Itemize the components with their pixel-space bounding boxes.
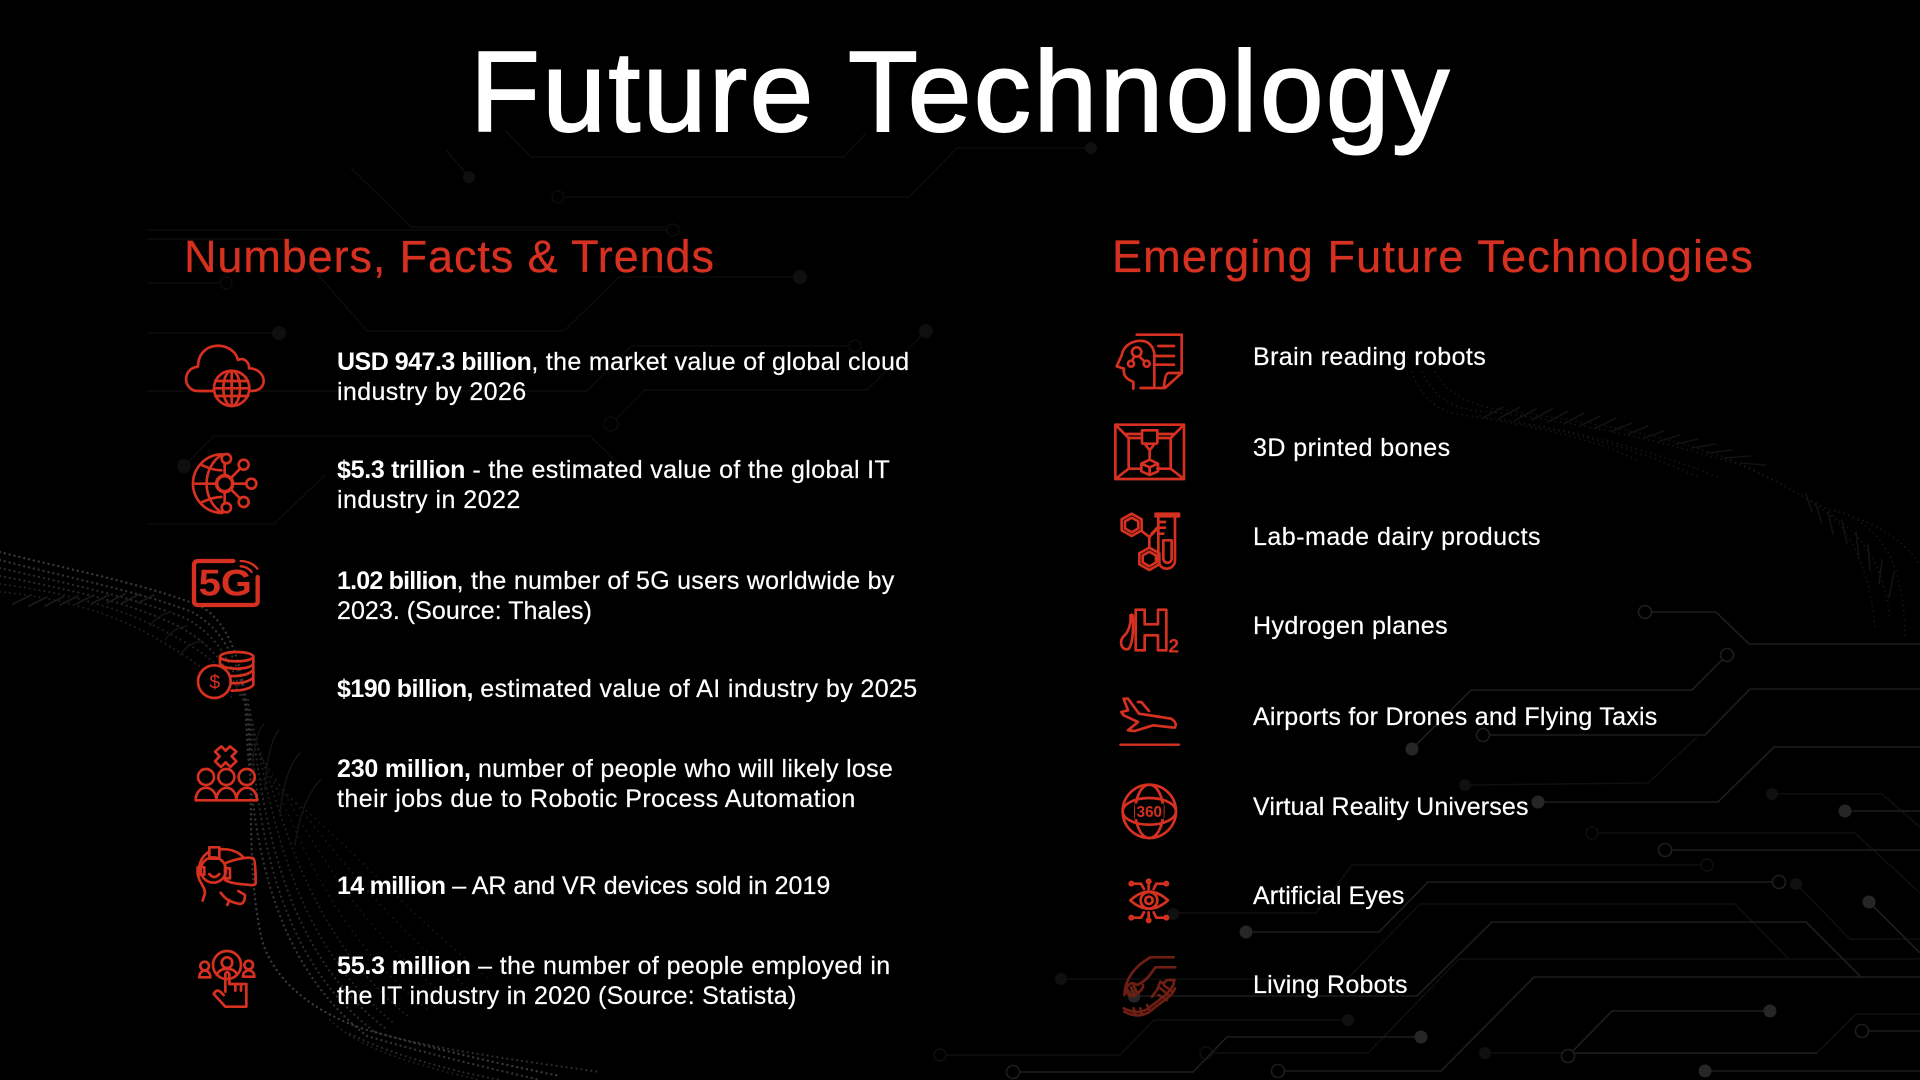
- heading: emerging future technologies: Emerging Future Technologies: [1112, 231, 1754, 282]
- text: airports for drones: Airports for Drones and Flying Taxis: [1253, 703, 1658, 731]
- text: IT employment: 55.3 million – the number of people employed in: [337, 952, 891, 980]
- icon: dollar coin and stack: [196, 650, 255, 700]
- text: cloud industry: [337, 348, 909, 406]
- text: IT industry value: industry in 2022: [337, 486, 521, 514]
- text: AI industry: $190 billion, estimated value of AI industry by 2025: [337, 675, 918, 703]
- icon: molecule and test tube: [1120, 512, 1180, 572]
- icon: 360 globe: 360: [1137, 804, 1162, 821]
- circuit traces: bottom right, bright: [1006, 606, 1920, 1078]
- text: living robots: Living Robots: [1253, 971, 1408, 999]
- heading: numbers, facts and trends: Numbers, Facts & Trends: [184, 231, 715, 282]
- icon: artificial eye: [1128, 878, 1170, 924]
- text: artificial eyes: Artificial Eyes: [1253, 882, 1405, 910]
- title: Future Technology: [470, 29, 1452, 156]
- icon: 5G: [192, 558, 260, 608]
- text: brain reading robots: Brain reading robots: [1253, 343, 1486, 371]
- icon: landing plane: [1119, 697, 1180, 746]
- icon: hydrogen: 2: [1169, 636, 1179, 657]
- dotted wave: left: [0, 552, 600, 1080]
- text: virtual reality universes: Virtual Reality Universes: [1253, 793, 1529, 821]
- panel: emerging future technologies: [1112, 231, 1754, 1017]
- text: 5G users: [337, 567, 895, 625]
- icon: VR headset: [196, 846, 257, 906]
- icon: head with document: [1115, 333, 1183, 390]
- text: job losses: [337, 755, 893, 813]
- icon: 360 globe: [1121, 783, 1178, 840]
- icon: 5G: 5G: [199, 561, 252, 603]
- circuit traces: bottom right, faint: [934, 737, 1920, 1061]
- text: AR and VR devices: 14 million – AR and VR devices sold in 2019: [337, 872, 830, 900]
- text: IT employment: the IT industry in 2020 (Source: Statista): [337, 982, 797, 1010]
- text: hydrogen planes: Hydrogen planes: [1253, 612, 1448, 640]
- text: IT industry value: [337, 456, 890, 514]
- dotted wave: right: [1412, 372, 1920, 640]
- text: cloud industry: industry by 2026: [337, 378, 527, 406]
- icon: 3D printer: [1114, 423, 1186, 480]
- text: job losses: 230 million, number of people who will likely lose: [337, 755, 893, 783]
- text: IT industry value: $5.3 trillion - the estimated value of the global IT: [337, 456, 890, 484]
- text: 5G users: 1.02 billion, the number of 5G users worldwide by: [337, 567, 895, 595]
- icon: cloud with globe: [184, 344, 265, 408]
- icon: hands, living robots: [1122, 956, 1177, 1017]
- text: 5G users: 2023. (Source: Thales): [337, 597, 592, 625]
- icon: dollar coin and stack: $: [209, 673, 220, 694]
- text: IT employment: [337, 952, 891, 1010]
- text: job losses: their jobs due to Robotic Process Automation: [337, 785, 856, 813]
- icon: people and pointing hand: [198, 950, 256, 1008]
- panel: numbers, facts and trends: [184, 231, 918, 1010]
- text: cloud industry: USD 947.3 billion, the market value of global cloud: [337, 348, 909, 376]
- icon: people with cross: [194, 745, 258, 802]
- icon: hydrogen: [1120, 608, 1179, 657]
- circuit traces: top and left: [147, 130, 1097, 524]
- icon: globe network: [192, 452, 258, 514]
- text: 3D printed bones: 3D printed bones: [1253, 434, 1451, 462]
- text: lab-made dairy: Lab-made dairy products: [1253, 523, 1541, 551]
